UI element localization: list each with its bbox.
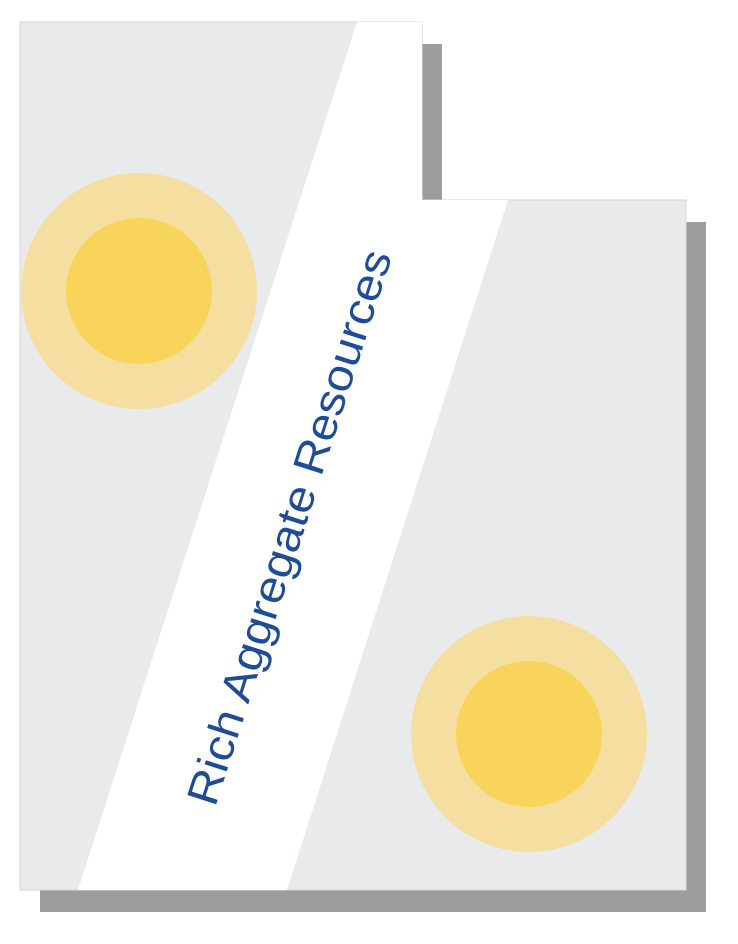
icon: upper-left circle bbox=[21, 173, 257, 409]
title: Rich Aggregate Resources: Rich Aggregate Resources bbox=[178, 244, 402, 811]
diagonal white band bbox=[78, 22, 508, 890]
icon: lower-right circle bbox=[411, 616, 647, 852]
